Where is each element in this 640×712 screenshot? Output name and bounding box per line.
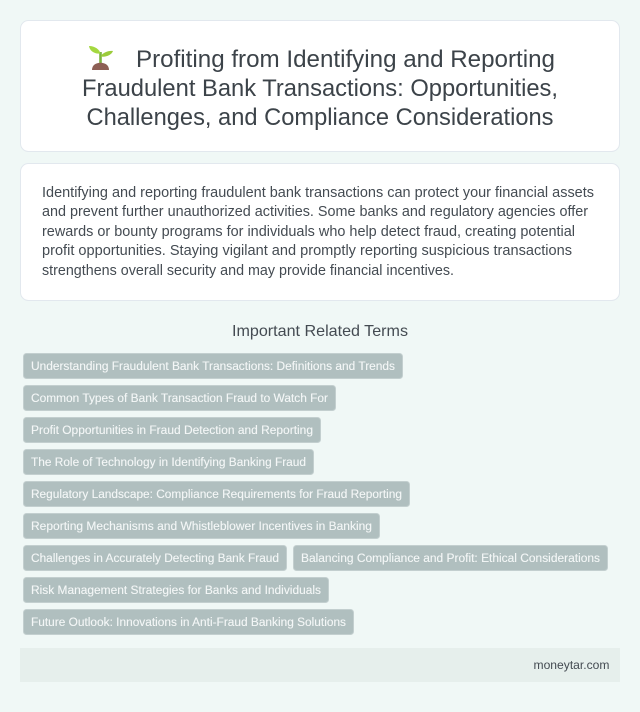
tag 9: Risk Management Strategies for Banks and Individuals — [31, 583, 321, 597]
tag 10 — [24, 610, 354, 634]
tag 4: The Role of Technology in Identifying Banking Fraud — [31, 455, 306, 469]
text block: introduction — [42, 185, 594, 279]
tag 2 — [24, 386, 336, 410]
heading: Challenges, and Compliance Considerations — [86, 104, 554, 131]
icon: seedling — [89, 46, 113, 70]
tag 8 — [294, 546, 608, 570]
text block: introduction: strengthens overall security and may provide financial incentives. — [42, 263, 454, 279]
text block: introduction: profit opportunities. Staying vigilant and promptly reporting suspicious transactions — [42, 243, 572, 259]
tag 3 — [24, 418, 320, 442]
tag 4 — [24, 450, 314, 474]
tag 1 — [24, 354, 402, 378]
tag 2: Common Types of Bank Transaction Fraud to Watch For — [31, 391, 328, 405]
panel: introduction — [20, 164, 620, 300]
heading: important related terms: Important Related Terms — [232, 323, 408, 340]
tag 5 — [24, 482, 410, 506]
tag 9 — [24, 578, 328, 602]
tag list — [24, 354, 608, 634]
panel: title card — [20, 20, 620, 152]
tag 6: Reporting Mechanisms and Whistleblower Incentives in Banking — [31, 519, 372, 533]
tag 3: Profit Opportunities in Fraud Detection and Reporting — [31, 423, 313, 437]
tag 1: Understanding Fraudulent Bank Transactions: Definitions and Trends — [31, 359, 395, 373]
tag 10: Future Outlook: Innovations in Anti-Fraud Banking Solutions — [31, 615, 346, 629]
heading: Fraudulent Bank Transactions: Opportunities, — [82, 75, 558, 102]
tag 7 — [24, 546, 286, 570]
text block: introduction: Identifying and reporting fraudulent bank transactions can protect your financial assets — [42, 185, 594, 201]
footer: moneytar.com — [534, 658, 610, 672]
heading — [82, 46, 558, 131]
text block: introduction: and prevent further unauthorized activities. Some banks and regulatory agencies offer — [42, 204, 588, 220]
text block: introduction: rewards or bounty programs for individuals who help detect fraud, creating potential — [42, 224, 575, 240]
tag 5: Regulatory Landscape: Compliance Requirements for Fraud Reporting — [31, 487, 402, 501]
tag 6 — [24, 514, 380, 538]
tag 7: Challenges in Accurately Detecting Bank Fraud — [31, 551, 279, 565]
footer — [20, 648, 620, 682]
tag 8: Balancing Compliance and Profit: Ethical Considerations — [301, 551, 600, 565]
heading: Profiting from Identifying and Reporting — [136, 46, 555, 73]
